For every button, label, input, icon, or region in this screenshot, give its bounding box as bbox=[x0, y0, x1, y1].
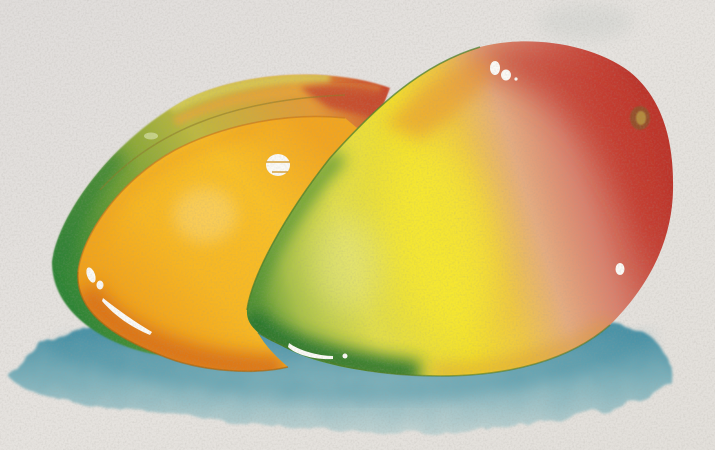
top red wash bbox=[460, 44, 672, 270]
blue shadow wash bbox=[10, 300, 675, 434]
front mango: green yellow red bbox=[247, 41, 673, 376]
deep orange lower edge bbox=[85, 290, 285, 368]
top orange wash bbox=[385, 60, 495, 140]
white highlights bbox=[85, 61, 624, 359]
middle mango: orange bbox=[78, 116, 362, 371]
back mango: green rim bbox=[52, 75, 390, 355]
orange lower-right edge bbox=[430, 325, 610, 372]
pencil smudge top right bbox=[537, 4, 633, 40]
green lower-left edge bbox=[248, 312, 420, 374]
pale green wash bbox=[311, 217, 379, 313]
highlight detail bbox=[266, 162, 290, 172]
stem scar bbox=[630, 106, 650, 130]
pale wash highlight bbox=[173, 187, 237, 243]
yellow glow bbox=[416, 146, 499, 313]
